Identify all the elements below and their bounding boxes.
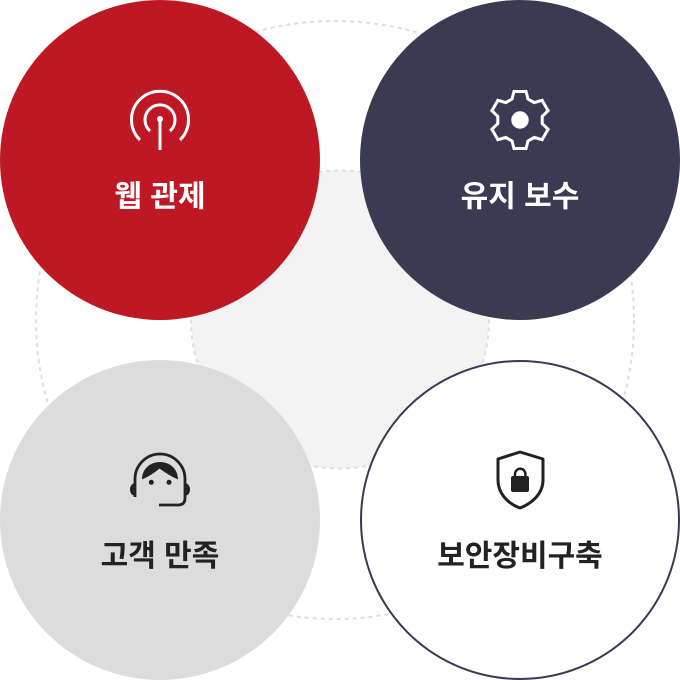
heading: web monitoring: 웹 관제 [114, 180, 206, 214]
panel: customer satisfaction [0, 360, 320, 680]
panel: security equipment [361, 361, 679, 679]
outer dashed ring [36, 21, 634, 619]
red circle [0, 0, 320, 320]
navy circle [360, 0, 680, 320]
heading: security equipment: 보안장비구축 [437, 540, 603, 573]
inner centre circle [191, 170, 489, 468]
heading: customer satisfaction: 고객 만족 [101, 540, 219, 573]
heading: maintenance: 유지 보수 [461, 180, 579, 214]
icon: antenna [132, 91, 188, 150]
icon: shield with lock [498, 452, 543, 508]
icon: headset person [130, 454, 190, 505]
panel: maintenance [360, 0, 680, 320]
grey circle [0, 360, 320, 680]
panel: web monitoring [0, 0, 320, 320]
white outlined circle [361, 361, 679, 679]
icon: gear [492, 92, 548, 148]
